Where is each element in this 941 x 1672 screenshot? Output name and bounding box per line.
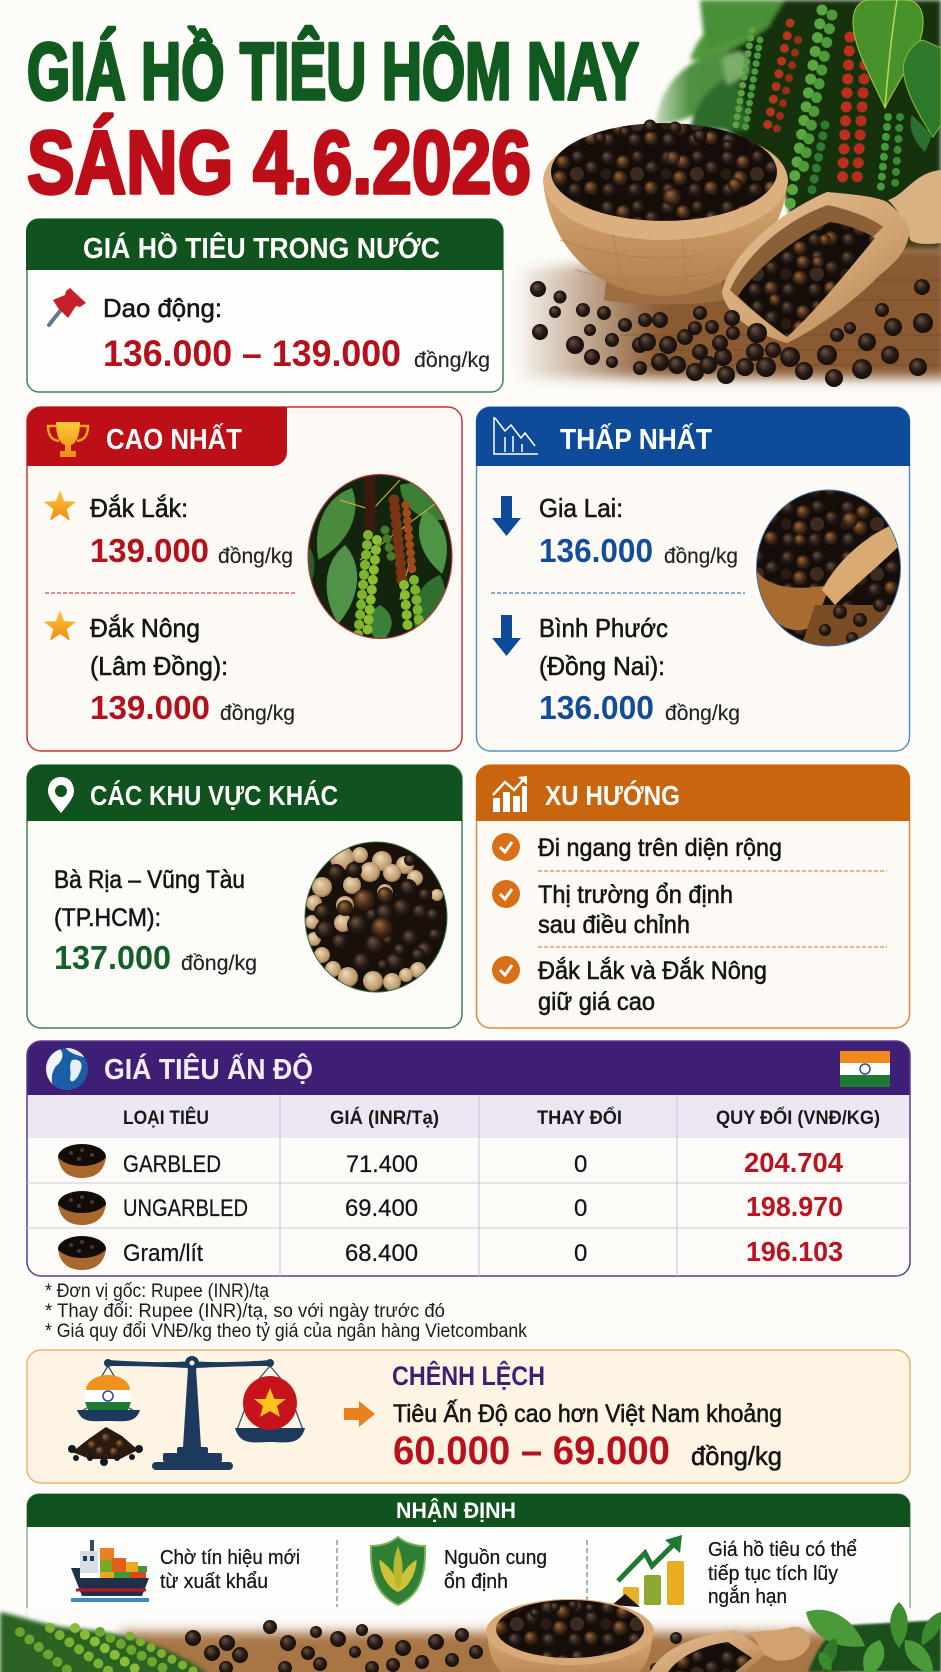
row: GARBLED — [58, 1144, 843, 1178]
panel: assessment: Chờ tín hiệu mới — [160, 1547, 300, 1569]
panel: highest price: 139.000 — [90, 532, 209, 569]
icon: falling chart — [494, 417, 538, 454]
image: pepper vines, bowl and scoop — [520, 0, 941, 387]
panel: highest price — [27, 407, 462, 751]
panel: domestic price: Dao động: — [103, 293, 222, 323]
heading: GIÁ TIÊU ẤN ĐỘ — [104, 1052, 313, 1086]
panel: assessment — [27, 1494, 910, 1634]
panel: assessment: Nguồn cung — [444, 1547, 547, 1569]
table header: GIÁ (INR/Tạ) — [330, 1107, 439, 1129]
icon: star — [44, 610, 76, 641]
panel: price difference: Tiêu Ấn Độ cao hơn Việt Nam khoảng — [393, 1399, 782, 1428]
table header — [123, 1107, 880, 1129]
row: GARBLED: 71.400 — [346, 1151, 418, 1178]
panel: assessment: từ xuất khẩu — [160, 1571, 268, 1593]
title: SÁNG 4.6.2026 — [27, 112, 531, 212]
icon: check — [492, 880, 520, 908]
panel: highest price: (Lâm Đồng): — [90, 651, 228, 681]
row: UNGARBLED: 198.970 — [746, 1191, 843, 1222]
row: UNGARBLED — [58, 1191, 843, 1225]
footnotes: * Đơn vị gốc: Rupee (INR)/tạ — [45, 1281, 269, 1302]
row: Gram/lít — [58, 1236, 843, 1270]
image: pepper plant — [308, 475, 452, 638]
icon: globe — [46, 1048, 88, 1090]
panel: other regions: (TP.HCM): — [54, 904, 161, 932]
panel: lowest price — [476, 407, 910, 751]
panel: price difference: CHÊNH LỆCH — [392, 1360, 545, 1391]
panel: trend: Thị trường ổn định — [538, 881, 733, 909]
row: Gram/lít: 0 — [574, 1240, 587, 1267]
row: Gram/lít: 196.103 — [746, 1236, 843, 1267]
icon: cargo ship — [71, 1540, 149, 1600]
row: UNGARBLED: 69.400 — [345, 1195, 418, 1222]
panel: highest price: đồng/kg — [220, 702, 295, 725]
panel: other regions: Bà Rịa – Vũng Tàu — [54, 866, 245, 894]
heading: NHẬN ĐỊNH — [396, 1498, 516, 1523]
panel: price difference — [27, 1350, 910, 1483]
icon: rising chart with coins — [612, 1535, 684, 1607]
panel: highest price: Đắk Nông — [90, 613, 200, 643]
row: GARBLED: GARBLED — [123, 1151, 221, 1178]
heading: GIÁ HỒ TIÊU TRONG NƯỚC — [83, 231, 440, 265]
heading: THẤP NHẤT — [560, 422, 712, 456]
heading: CÁC KHU VỰC KHÁC — [90, 780, 338, 811]
panel: lowest price: 136.000 — [539, 532, 653, 569]
table header: QUY ĐỔI (VNĐ/KG) — [716, 1107, 880, 1129]
panel: price difference: 60.000 – 69.000 — [393, 1429, 670, 1473]
panel: assessment: ổn định — [444, 1571, 508, 1593]
icon: check — [492, 833, 520, 861]
icon: check — [492, 956, 520, 984]
panel: lowest price: Gia Lai: — [539, 493, 623, 523]
icon: rising chart — [493, 776, 527, 812]
heading: XU HƯỚNG — [545, 780, 680, 811]
table header: LOẠI TIÊU — [123, 1107, 209, 1129]
panel: lowest price: Bình Phước — [539, 613, 668, 643]
icon: shield with leaf — [371, 1537, 425, 1605]
panel: lowest price: đồng/kg — [665, 702, 740, 725]
panel: trend: Đắk Lắk và Đắk Nông — [538, 956, 767, 985]
icon: pushpin — [49, 288, 86, 325]
panel: other regions — [27, 765, 462, 1028]
panel: price difference: đồng/kg — [691, 1441, 782, 1471]
panel: highest price: 139.000 — [90, 689, 210, 726]
table header: THAY ĐỔI — [537, 1107, 622, 1129]
panel: highest price: Đắk Lắk: — [90, 493, 188, 523]
panel: assessment: Giá hồ tiêu có thể — [708, 1539, 857, 1561]
icon: down arrow — [492, 615, 521, 656]
panel: trend: Đi ngang trên diện rộng — [538, 834, 782, 862]
panel: trend: giữ giá cao — [538, 988, 655, 1016]
panel: highest price: đồng/kg — [218, 545, 293, 568]
icon: India flag — [840, 1051, 890, 1087]
image: mixed peppercorns — [305, 842, 447, 992]
panel: domestic price: đồng/kg — [414, 349, 490, 372]
image: peppercorns in wooden bowl — [755, 489, 903, 650]
row: Gram/lít: 68.400 — [345, 1240, 418, 1267]
icon: arrow — [344, 1401, 375, 1427]
panel: lowest price: 136.000 — [539, 689, 654, 726]
row: UNGARBLED: UNGARBLED — [123, 1195, 248, 1222]
icon: star — [44, 490, 76, 521]
panel: other regions: 137.000 — [54, 939, 171, 976]
footnotes: * Thay đổi: Rupee (INR)/tạ, so với ngày trước đó — [45, 1301, 445, 1322]
footnotes: * Giá quy đổi VNĐ/kg theo tỷ giá của ngân hàng Vietcombank — [45, 1321, 527, 1342]
panel: trend: sau điều chỉnh — [538, 911, 690, 939]
panel: assessment: ngắn hạn — [708, 1585, 787, 1608]
panel: domestic price: 136.000 – 139.000 — [103, 333, 401, 374]
panel: other regions: đồng/kg — [181, 952, 257, 975]
row: UNGARBLED: 0 — [574, 1195, 587, 1222]
image: bottom pepper border — [0, 1599, 941, 1672]
icon: trophy — [48, 422, 88, 457]
table: India pepper prices — [27, 1041, 910, 1276]
row: GARBLED: 204.704 — [744, 1147, 843, 1178]
panel: domestic price — [26, 219, 503, 392]
title: GIÁ HỒ TIÊU HÔM NAY — [27, 25, 639, 117]
icon: balance scale with flags — [68, 1356, 305, 1470]
row: GARBLED: 0 — [574, 1151, 587, 1178]
icon: down arrow — [492, 496, 521, 536]
panel: trend — [476, 765, 910, 1028]
title — [27, 25, 639, 212]
heading: CAO NHẤT — [106, 422, 242, 456]
footnotes — [45, 1281, 527, 1342]
panel: assessment: tiếp tục tích lũy — [708, 1563, 838, 1585]
panel: lowest price: (Đồng Nai): — [539, 651, 665, 681]
panel: lowest price: đồng/kg — [664, 545, 738, 568]
row: Gram/lít: Gram/lít — [123, 1240, 203, 1267]
icon: location pin — [48, 777, 74, 813]
